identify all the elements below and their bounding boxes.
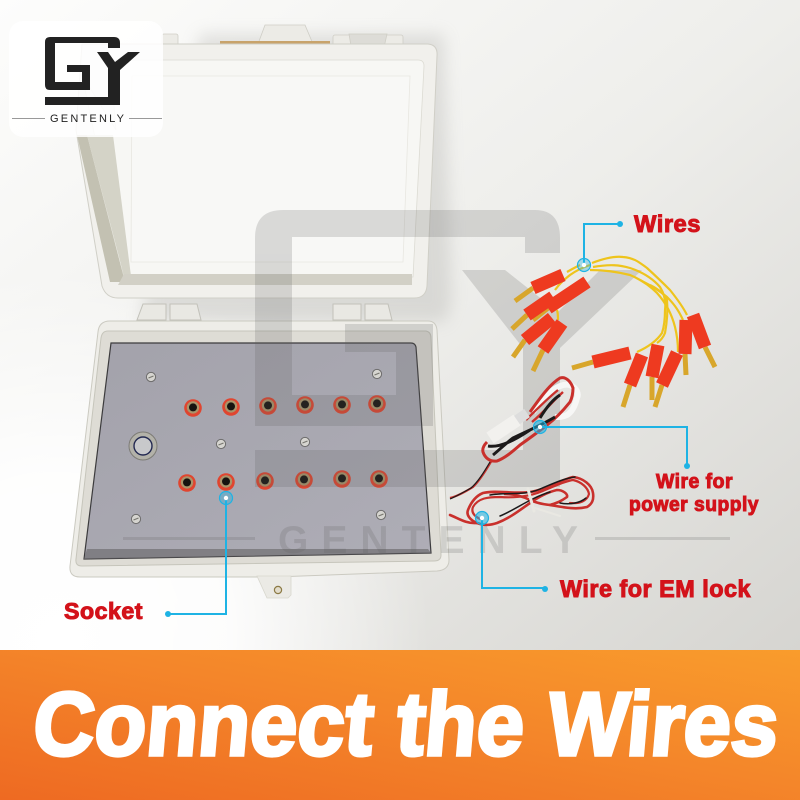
callout: EM lock wire [476, 512, 548, 592]
open enclosure lid [76, 25, 437, 298]
yellow jumper wires [512, 257, 715, 407]
top socket row [184, 395, 386, 417]
logo [9, 21, 163, 137]
grey panel [84, 343, 431, 559]
DC jack [490, 420, 517, 438]
label: power wire [629, 471, 759, 516]
power supply cable [450, 378, 578, 499]
wire strands [555, 257, 687, 352]
watermark: GENTENLY [278, 519, 578, 562]
open enclosure base [70, 321, 449, 598]
watermark [123, 210, 730, 562]
label: socket: Socket [64, 598, 143, 624]
logo wordmark: GENTENLY [50, 113, 125, 125]
banana plugs [512, 275, 715, 407]
label: wires: Wires [634, 211, 701, 238]
lid latches [162, 25, 403, 52]
mounting tab [257, 576, 291, 598]
push button [129, 432, 157, 460]
label: power wire: Wire for [656, 471, 733, 493]
EM lock cable [450, 477, 593, 525]
hinges [137, 304, 392, 320]
callout: power wire [534, 420, 690, 469]
callout: socket [165, 492, 232, 617]
label: EM lock wire: Wire for EM lock [560, 576, 751, 603]
callout: wires [578, 221, 623, 272]
orange banner [0, 650, 800, 800]
label: power wire: power supply [629, 494, 759, 516]
logo mark [45, 37, 140, 105]
panel screws [131, 369, 386, 524]
bottom socket row [178, 470, 388, 492]
